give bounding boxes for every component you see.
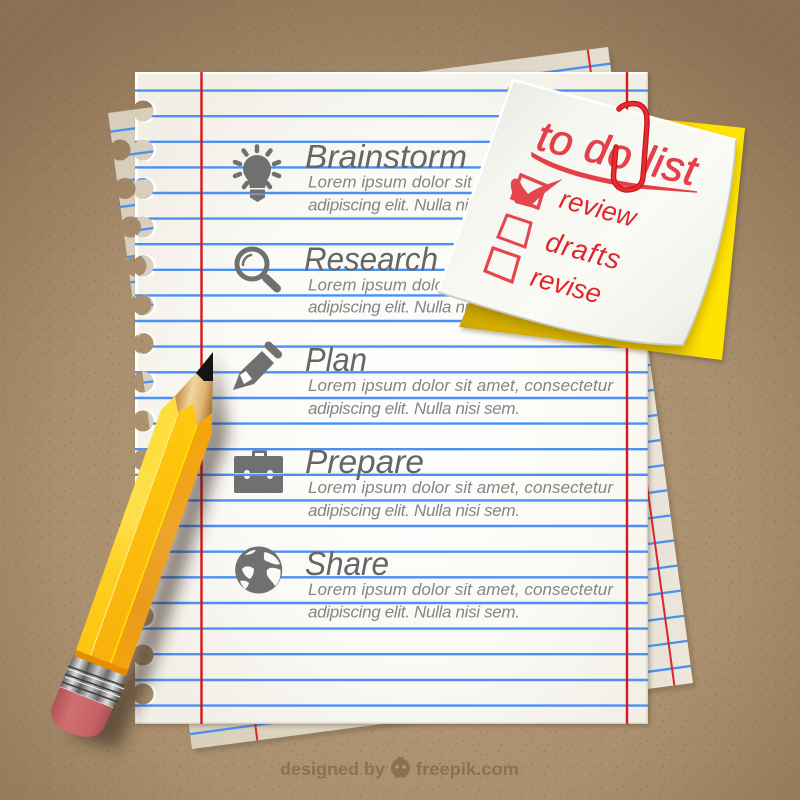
icon: light bulb [235, 146, 279, 202]
text: Prepare description [308, 478, 614, 520]
label: revise: revise [527, 262, 605, 309]
checkbox: review, checked [511, 175, 563, 208]
checkbox: drafts [498, 215, 531, 247]
text: Brainstorm description [308, 173, 614, 215]
heading: Prepare: Prepare [305, 443, 424, 480]
heading: Share: Share [305, 545, 389, 582]
label: drafts: drafts [542, 226, 624, 275]
text: Prepare description: adipiscing elit. Nulla nisi sem. [308, 501, 520, 520]
pencil lead [196, 352, 213, 381]
item: Share [235, 545, 614, 622]
label: review: review [556, 184, 641, 233]
text: Share description [308, 580, 614, 622]
checkbox: revise [485, 248, 519, 282]
heading: Research: Research [304, 240, 438, 278]
freepik credit [280, 757, 519, 779]
white to-do note [438, 80, 736, 345]
pencil body [76, 396, 212, 670]
back sheet of lined paper [108, 47, 696, 754]
red paper clip [613, 104, 647, 190]
text: Research description: Lorem ipsum dolor sit amet, consectetur [308, 276, 614, 294]
icon: freepik mascot [391, 757, 410, 778]
title underline [532, 153, 697, 192]
text: Plan description [308, 376, 614, 418]
pencil shadow [70, 355, 228, 750]
yellow sticky note [439, 87, 747, 363]
item: Prepare [234, 443, 614, 520]
note sheet [438, 80, 736, 345]
icon: briefcase [234, 450, 283, 493]
icon: pencil [233, 346, 278, 390]
text: Share description: adipiscing elit. Nulla nisi sem. [308, 602, 520, 622]
icon: magnifying glass [237, 249, 277, 288]
icon: globe [235, 546, 282, 594]
pink eraser [51, 687, 113, 737]
text: Research description: adipiscing elit. Nulla nisi sem. [308, 298, 520, 316]
title: to do list: to do list [533, 112, 704, 195]
text: Share description: Lorem ipsum dolor sit amet, consectetur [308, 580, 614, 599]
item: Plan [233, 341, 614, 418]
main sheet of lined paper [134, 72, 650, 726]
text: Brainstorm description: Lorem ipsum dolor sit amet, consectetur [308, 173, 614, 192]
metal ferrule [60, 650, 128, 708]
heading: Brainstorm: Brainstorm [305, 138, 467, 175]
yellow pencil [51, 352, 228, 750]
text: Prepare description: Lorem ipsum dolor sit amet, consectetur [308, 478, 614, 497]
pencil wood tip [175, 373, 213, 425]
text: Plan description: Lorem ipsum dolor sit amet, consectetur [308, 376, 614, 395]
freepik credit: freepik.com [416, 759, 519, 779]
text: Plan description: adipiscing elit. Nulla nisi sem. [308, 399, 520, 418]
text: Brainstorm description: adipiscing elit. Nulla nisi sem. [308, 196, 520, 215]
heading: Plan: Plan [305, 341, 367, 378]
item: Research [237, 240, 614, 316]
item: Brainstorm [235, 138, 614, 215]
freepik credit: designed by [280, 759, 385, 779]
text: Research description [308, 276, 614, 316]
